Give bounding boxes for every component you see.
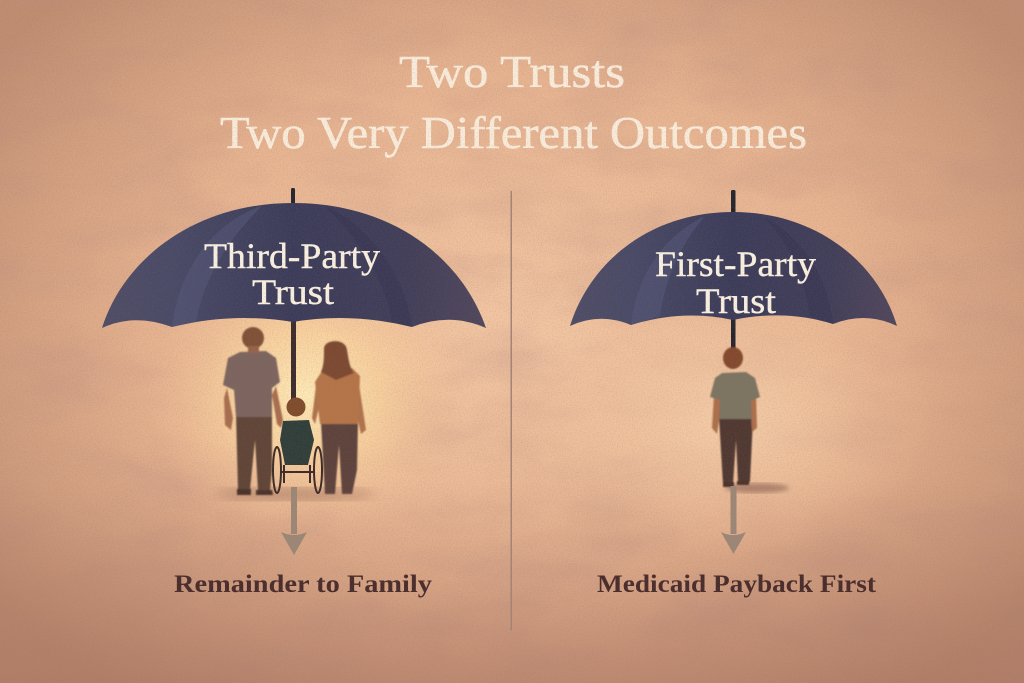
umbrella label: Trust [252,272,334,312]
umbrella label [204,236,380,312]
umbrella label: Trust [696,281,776,321]
umbrella label: First-Party [655,244,816,284]
figure: child in wheelchair [273,398,322,493]
icon: umbrella canopy [570,212,897,326]
arrow: medicaid payback [721,486,746,554]
title: Two Very Different Outcomes [220,108,807,158]
panel: third-party trust [102,188,486,598]
umbrella label: Third-Party [204,236,380,276]
outcome label: Medicaid Payback First [597,571,877,598]
figure: father [223,327,283,495]
panel: first-party trust [570,190,897,598]
figure: mother [312,341,366,494]
person shadow [725,483,789,493]
icon: umbrella shaft [731,190,736,352]
icon: umbrella canopy [102,203,486,328]
glow behind family [145,255,465,535]
family ground shadow [215,488,375,500]
divider [510,191,512,630]
umbrella label [655,244,816,321]
figure: person [710,347,760,487]
title: Two Trusts [399,47,625,97]
arrow: remainder [281,487,307,555]
outcome label: Remainder to Family [174,571,433,598]
icon: umbrella shaft [291,188,296,400]
title [220,47,807,158]
